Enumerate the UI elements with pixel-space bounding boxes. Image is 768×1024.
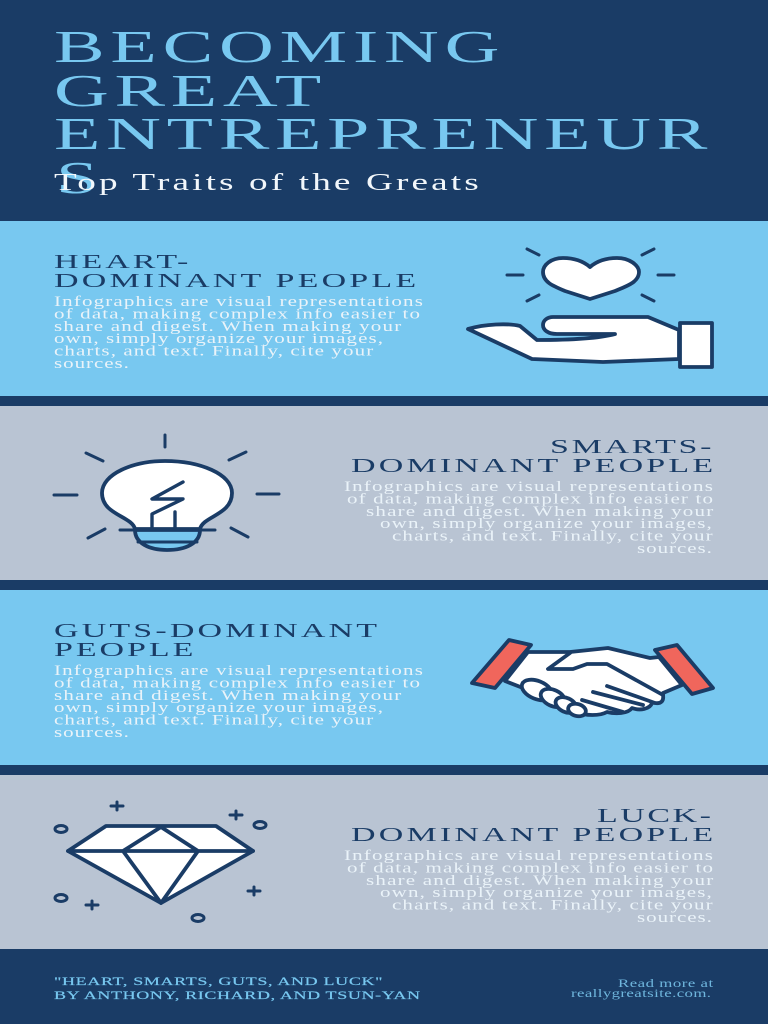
heading: heart: DOMINANT PEOPLE bbox=[54, 270, 416, 292]
heading: guts: GUTS-DOMINANT bbox=[54, 620, 377, 642]
divider band bbox=[0, 580, 768, 590]
title bbox=[54, 21, 708, 203]
heading: luck: DOMINANT PEOPLE bbox=[351, 824, 713, 846]
body text: smarts bbox=[344, 478, 713, 556]
book citation: "HEART, SMARTS, GUTS, AND LUCK" bbox=[54, 975, 383, 988]
heading: heart bbox=[54, 251, 416, 292]
icon: light bulb bbox=[54, 435, 279, 550]
icon: diamond bbox=[55, 802, 266, 922]
body text: smarts: share and digest. When making your bbox=[366, 503, 713, 519]
icon: hand holding heart bbox=[468, 249, 712, 367]
body text: heart bbox=[54, 293, 423, 371]
title: BECOMING bbox=[54, 21, 500, 72]
header bbox=[0, 0, 768, 221]
book citation bbox=[54, 975, 420, 1002]
body text: luck: of data, making complex info easier to bbox=[347, 859, 713, 876]
body text: heart: charts, and text. Finally, cite your bbox=[54, 342, 373, 359]
body text: guts: own, simply organize your images, bbox=[54, 699, 383, 715]
body text: luck: share and digest. When making your bbox=[366, 872, 713, 888]
heading: guts bbox=[54, 620, 377, 661]
title: ENTREPRENEUR bbox=[54, 108, 708, 159]
panel: guts-dominant people bbox=[0, 590, 768, 765]
heading: guts: PEOPLE bbox=[54, 639, 193, 661]
body text: smarts: of data, making complex info easier to bbox=[347, 490, 713, 507]
body text: smarts: own, simply organize your images, bbox=[380, 515, 712, 531]
panel: heart-dominant people bbox=[0, 221, 768, 396]
body text: luck: sources. bbox=[637, 909, 712, 925]
body text: guts: sources. bbox=[54, 724, 129, 740]
heading: luck bbox=[351, 805, 713, 846]
body text: guts: charts, and text. Finally, cite your bbox=[54, 711, 373, 728]
body text: heart: own, simply organize your images, bbox=[54, 330, 383, 346]
body text: guts bbox=[54, 662, 423, 740]
body text: smarts: sources. bbox=[637, 540, 712, 556]
subtitle: Top Traits of the Greats bbox=[54, 169, 479, 195]
body text: heart: Infographics are visual representations bbox=[54, 293, 423, 309]
panel: smarts-dominant people bbox=[0, 406, 768, 580]
title: GREAT bbox=[54, 65, 321, 116]
panel: luck-dominant people bbox=[0, 775, 768, 949]
body text: luck: own, simply organize your images, bbox=[380, 884, 712, 900]
divider band bbox=[0, 396, 768, 406]
body text: luck: Infographics are visual representations bbox=[344, 847, 713, 863]
read more link: Read more at bbox=[618, 977, 713, 990]
body text: smarts: Infographics are visual representations bbox=[344, 478, 713, 494]
body text: luck bbox=[344, 847, 713, 925]
body text: heart: sources. bbox=[54, 355, 129, 371]
read more link bbox=[571, 977, 713, 1000]
heading: luck: LUCK- bbox=[597, 805, 711, 827]
book citation: BY ANTHONY, RICHARD, AND TSUN-YAN bbox=[54, 989, 420, 1002]
body text: heart: of data, making complex info easier to bbox=[54, 305, 420, 322]
heading: smarts: SMARTS- bbox=[550, 436, 712, 458]
heading: smarts: DOMINANT PEOPLE bbox=[351, 455, 713, 477]
title: S bbox=[56, 152, 98, 203]
read more link: reallygreatsite.com. bbox=[571, 987, 711, 1000]
body text: guts: share and digest. When making your bbox=[54, 687, 401, 703]
body text: luck: charts, and text. Finally, cite your bbox=[392, 896, 713, 913]
body text: heart: share and digest. When making your bbox=[54, 318, 401, 334]
heading: smarts bbox=[351, 436, 713, 477]
footer bbox=[0, 949, 768, 1024]
icon: handshake bbox=[472, 640, 713, 718]
heading: heart: HEART- bbox=[54, 251, 188, 273]
body text: guts: Infographics are visual representations bbox=[54, 662, 423, 678]
divider band bbox=[0, 765, 768, 775]
body text: guts: of data, making complex info easier to bbox=[54, 674, 420, 691]
body text: smarts: charts, and text. Finally, cite your bbox=[392, 527, 713, 544]
